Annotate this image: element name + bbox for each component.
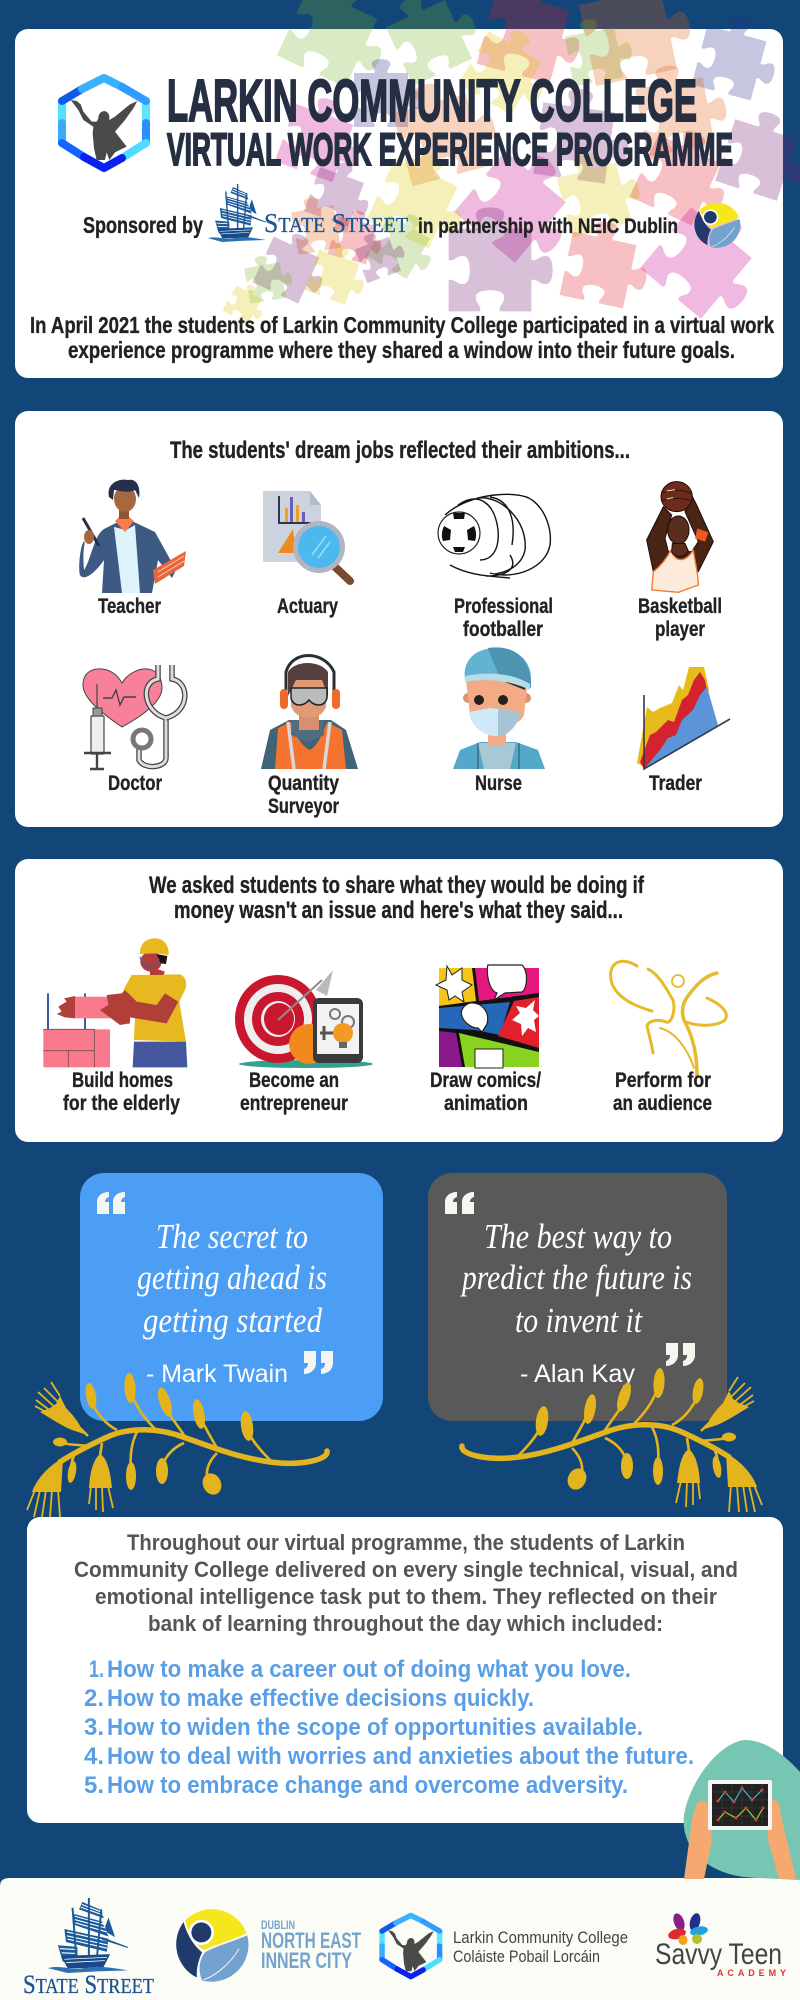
left gold branch <box>27 1373 327 1517</box>
left arm <box>684 1801 712 1879</box>
dream jobs card <box>15 411 783 827</box>
footer strip <box>0 1878 800 2000</box>
icon: nurse <box>453 647 545 769</box>
icon: closing quote <box>304 1351 333 1374</box>
label: quantity surveyor: Surveyor <box>268 795 339 818</box>
logo: State Street: STATE STREET <box>23 1970 154 1999</box>
logo: Larkin Community College <box>382 1915 628 1977</box>
intro text <box>30 312 774 363</box>
label: entrepreneur: entrepreneur <box>240 1092 348 1115</box>
label: professional footballer: footballer <box>463 618 543 641</box>
icon: Larkin hexagon logo <box>62 78 146 168</box>
icon: closing quote <box>666 1343 695 1366</box>
puzzle pieces decoration <box>222 0 800 332</box>
attribution: - Mark Twain <box>146 1360 288 1388</box>
green blob <box>684 1740 800 1880</box>
summary paragraph: Throughout our virtual programme, the students of Larkin <box>127 1530 685 1555</box>
icon: football <box>438 494 550 578</box>
learning list: 4. <box>84 1743 104 1770</box>
label: nurse: Nurse <box>475 772 522 795</box>
label: comics: Draw comics/ <box>430 1069 541 1092</box>
label: build homes: Build homes <box>72 1069 173 1092</box>
label: build homes: for the elderly <box>63 1092 180 1115</box>
attribution: - Alan Kay <box>520 1360 636 1388</box>
icon: quantity surveyor <box>261 656 358 769</box>
grey quote card <box>428 1173 727 1421</box>
panel: programme summary <box>27 1517 783 1823</box>
panel: header <box>15 0 800 378</box>
icon: actuary <box>263 491 350 581</box>
sponsors line <box>83 184 740 248</box>
icon: teacher <box>79 480 186 593</box>
heading: money question <box>149 872 645 924</box>
logo: North East Inner City: NORTH EAST <box>261 1928 361 1953</box>
logo: Savvy Teen Academy: ACADEMY <box>717 1968 786 1978</box>
panel: if money was not an issue <box>15 859 783 1142</box>
sponsors line: STATE STREET <box>264 208 408 238</box>
icon: doctor <box>83 665 185 769</box>
heading: money question: money wasn't an issue and here's what they said... <box>174 897 623 924</box>
learning list: How to embrace change and overcome adversity. <box>107 1772 628 1799</box>
summary paragraph: bank of learning throughout the day which included: <box>148 1611 663 1636</box>
panel: quote Alan Kay <box>428 1173 727 1421</box>
learning list: How to deal with worries and anxieties about the future. <box>107 1743 694 1770</box>
label: entrepreneur: Become an <box>249 1069 339 1092</box>
quote text <box>459 1217 692 1340</box>
label: basketball player: player <box>655 618 705 641</box>
right gold branch <box>462 1368 762 1512</box>
logo: North East Inner City: DUBLIN <box>261 1918 295 1932</box>
icon: trader chart <box>637 667 730 769</box>
label: professional footballer <box>454 595 553 641</box>
label: quantity surveyor <box>268 772 339 818</box>
panel: footer logos <box>0 1878 800 2000</box>
label: perform: Perform for <box>615 1069 711 1092</box>
icon: dancer <box>611 961 726 1075</box>
summary paragraph <box>74 1530 738 1636</box>
label: comics <box>430 1069 541 1115</box>
label: entrepreneur <box>240 1069 348 1115</box>
learning list: 5. <box>84 1772 104 1799</box>
learning list: 2. <box>84 1685 104 1712</box>
logo: North East Inner City: INNER CITY <box>261 1948 352 1973</box>
summary paragraph: emotional intelligence task put to them. They reflected on their <box>95 1584 717 1609</box>
label: basketball player: Basketball <box>638 595 722 618</box>
icon: opening quote <box>445 1192 474 1214</box>
quote text: to invent it <box>515 1301 643 1340</box>
logo: North East Inner City <box>176 1909 361 1982</box>
quote text: The secret to <box>156 1217 308 1256</box>
label: perform <box>613 1069 712 1115</box>
label: build homes <box>63 1069 180 1115</box>
label: doctor: Doctor <box>108 772 162 795</box>
label: actuary: Actuary <box>277 595 338 618</box>
sponsors line: Sponsored by <box>83 212 203 238</box>
tablet <box>708 1780 772 1830</box>
summary card <box>27 1517 783 1823</box>
money card <box>15 859 783 1142</box>
quote text: predict the future is <box>459 1258 692 1297</box>
learning list: 1. <box>89 1656 104 1683</box>
label: teacher: Teacher <box>98 595 161 618</box>
heading: money question: We asked students to share what they would be doing if <box>149 872 645 899</box>
icon: builder <box>43 938 187 1067</box>
title <box>167 68 733 175</box>
logo: Savvy Teen Academy <box>655 1912 786 1978</box>
learning list: How to widen the scope of opportunities available. <box>107 1714 643 1741</box>
icon: entrepreneur target <box>235 970 373 1068</box>
label: quantity surveyor: Quantity <box>268 772 339 795</box>
summary paragraph: Community College delivered on every single technical, visual, and <box>74 1557 738 1582</box>
quote text <box>137 1217 327 1340</box>
icon: comics <box>436 965 539 1068</box>
right arm <box>768 1800 796 1879</box>
sponsors line: in partnership with NEIC Dublin <box>418 215 678 238</box>
label: basketball player <box>638 595 722 641</box>
header card <box>15 29 783 378</box>
logo: Larkin Community College: Larkin Community College <box>453 1928 628 1947</box>
panel: dream jobs <box>15 411 783 827</box>
quote text: The best way to <box>484 1217 672 1256</box>
learning list: How to make effective decisions quickly. <box>107 1685 534 1712</box>
quote text: getting ahead is <box>137 1258 327 1297</box>
learning list <box>84 1656 694 1799</box>
panel: quote Mark Twain <box>80 1173 383 1421</box>
learning list: 3. <box>84 1714 104 1741</box>
label: professional footballer: Professional <box>454 595 553 618</box>
learning list: How to make a career out of doing what you love. <box>107 1656 631 1683</box>
heading: dream jobs: The students' dream jobs reflected their ambitions... <box>170 437 630 464</box>
icon: opening quote <box>97 1192 125 1214</box>
illustration: hands holding tablet <box>684 1740 800 1880</box>
logo: State Street <box>23 1898 154 1999</box>
blue quote card <box>80 1173 383 1421</box>
label: comics: animation <box>444 1092 528 1115</box>
label: perform: an audience <box>613 1092 712 1115</box>
icon: basketball player <box>647 482 713 592</box>
logo: Larkin Community College: Coláiste Pobail Lorcáin <box>453 1947 600 1966</box>
label: trader: Trader <box>649 772 702 795</box>
quote text: getting started <box>143 1301 322 1340</box>
